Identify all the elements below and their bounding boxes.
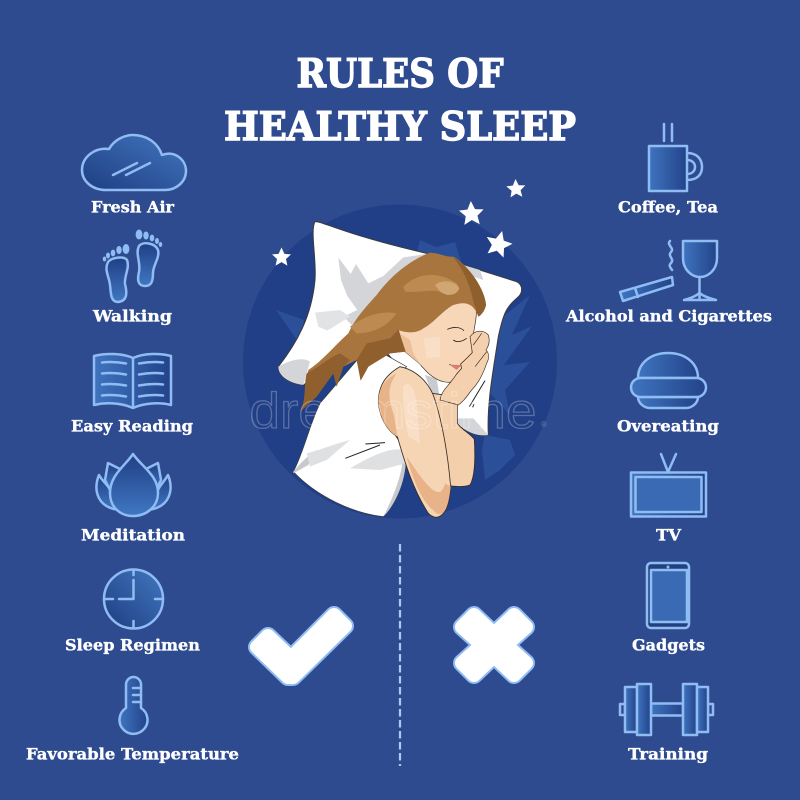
label: Favorable Temperature: Favorable Temperature bbox=[26, 744, 239, 764]
pillow bbox=[278, 222, 522, 435]
icon: coffee mug bbox=[649, 124, 702, 191]
watermark: ® bbox=[541, 420, 547, 429]
hand bbox=[440, 331, 489, 405]
title: RULES OF bbox=[296, 51, 504, 97]
label: Overeating: Overeating bbox=[617, 416, 719, 436]
icon: thermometer bbox=[120, 677, 148, 734]
dashed divider bbox=[399, 544, 401, 766]
icon: dumbbell bbox=[620, 684, 713, 735]
icon: clock bbox=[104, 570, 163, 628]
label: Walking: Walking bbox=[92, 306, 172, 326]
icon: TV bbox=[631, 454, 706, 516]
icon: burger bbox=[631, 353, 706, 408]
label: Fresh Air: Fresh Air bbox=[91, 198, 175, 216]
label: Sleep Regimen: Sleep Regimen bbox=[65, 636, 200, 654]
center circle backdrop bbox=[243, 204, 557, 518]
icon: cloud bbox=[82, 135, 186, 190]
icon: footprints bbox=[103, 230, 162, 302]
forearm bbox=[432, 393, 475, 487]
icon: lotus bbox=[97, 454, 170, 516]
check mark bbox=[257, 615, 345, 677]
icon: tablet bbox=[647, 563, 689, 628]
label: Easy Reading: Easy Reading bbox=[71, 416, 193, 436]
blanket bbox=[293, 352, 407, 517]
label: Gadgets: Gadgets bbox=[632, 636, 705, 654]
head bbox=[398, 302, 476, 382]
label: Alcohol and Cigarettes: Alcohol and Cigarettes bbox=[565, 306, 772, 326]
hair bbox=[300, 253, 486, 412]
label: Meditation: Meditation bbox=[81, 526, 185, 544]
upper arm and shoulder bbox=[378, 367, 451, 517]
cross mark bbox=[462, 615, 526, 675]
stars bbox=[272, 179, 526, 266]
title bbox=[224, 51, 576, 150]
watermark: dreamstime bbox=[250, 383, 536, 439]
label: TV: TV bbox=[656, 526, 682, 544]
icon: open book bbox=[94, 354, 171, 408]
woman sleeping on a pillow bbox=[278, 222, 522, 517]
background leaves bbox=[276, 240, 532, 480]
label: Coffee, Tea: Coffee, Tea bbox=[618, 198, 718, 216]
icon: cigarette and wine glass bbox=[620, 241, 717, 301]
label: Training: Training bbox=[628, 744, 708, 764]
title: HEALTHY SLEEP bbox=[224, 104, 576, 150]
